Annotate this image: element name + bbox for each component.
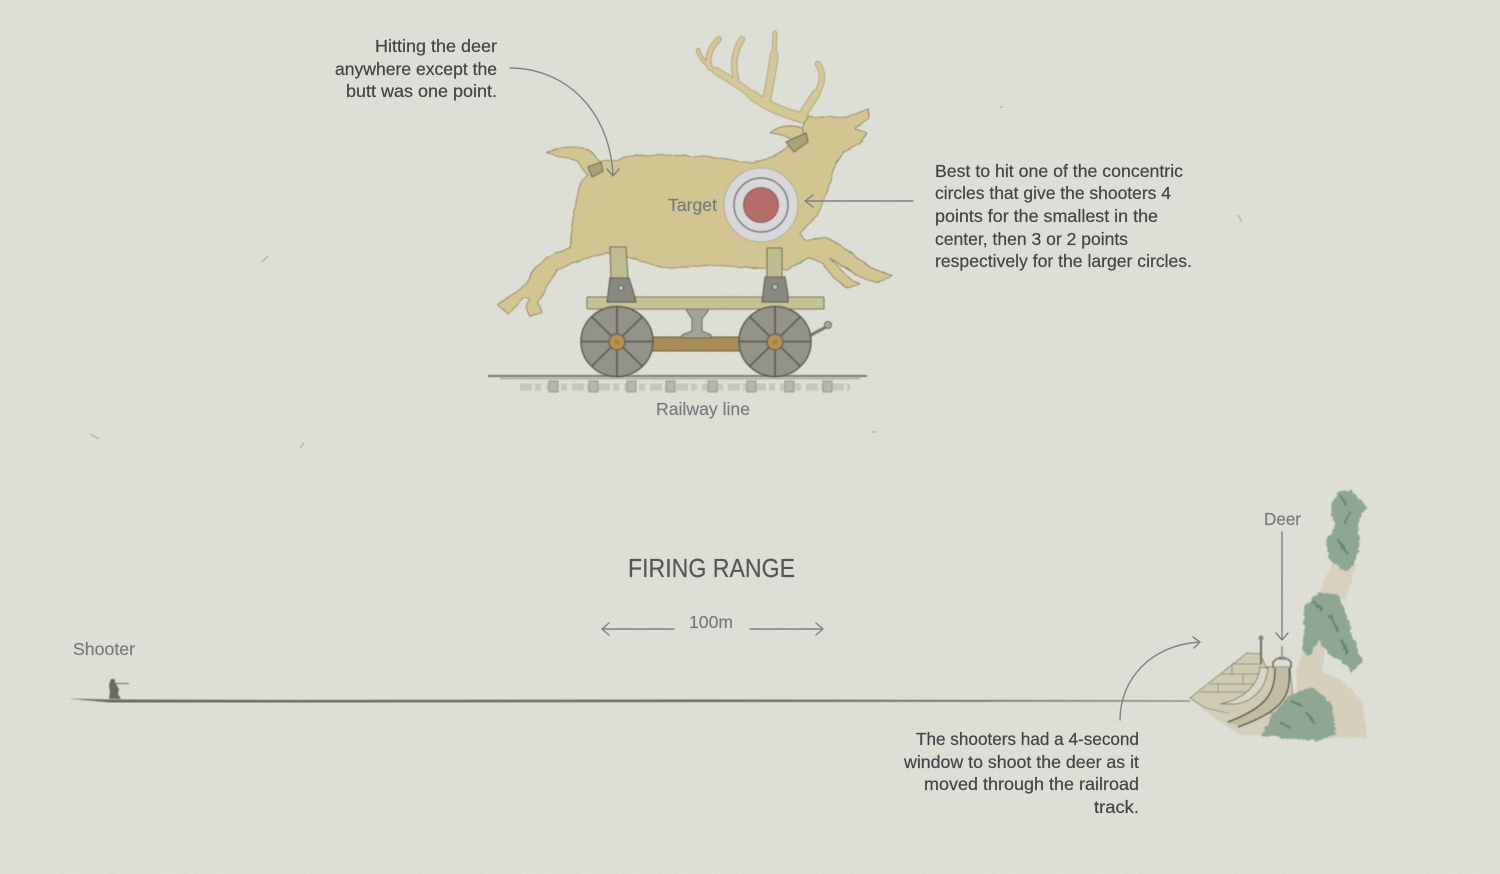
right wheel xyxy=(739,306,811,376)
arrow: to deer body xyxy=(510,68,619,176)
foliage xyxy=(1262,490,1367,741)
rock pillar xyxy=(1296,625,1367,738)
text: concentric circles: respectively for the larger circles. xyxy=(935,251,1192,271)
text: concentric circles xyxy=(935,161,1192,271)
embankment xyxy=(1190,636,1300,735)
label: 100m: 100m xyxy=(689,612,733,632)
railway track xyxy=(488,376,867,392)
deer antlers xyxy=(698,33,822,120)
text: concentric circles: circles that give the shooters 4 xyxy=(935,183,1171,203)
heading: firing range: FIRING RANGE xyxy=(628,553,795,583)
label: Shooter: Shooter xyxy=(73,639,135,659)
left wheel xyxy=(581,306,653,376)
text: hitting the deer: butt was one point. xyxy=(346,81,497,101)
text: concentric circles: center, then 3 or 2 points xyxy=(935,229,1128,249)
illustration: deer target on railcar xyxy=(488,33,892,392)
label: Railway line: Railway line xyxy=(656,399,750,419)
left post xyxy=(607,247,636,302)
illustration: hillside with trees xyxy=(1190,490,1367,741)
right post xyxy=(762,248,788,302)
text: 4-second window xyxy=(903,729,1139,817)
text: concentric circles: points for the smallest in the xyxy=(935,206,1158,226)
label: Target: Target xyxy=(668,195,717,215)
ground line xyxy=(68,698,1190,702)
arrow: window curve xyxy=(1120,637,1200,720)
deer body xyxy=(498,109,892,317)
text: concentric circles: Best to hit one of the concentric xyxy=(935,161,1183,181)
arrow: to target xyxy=(805,195,913,207)
tail joint xyxy=(588,162,603,177)
railcar xyxy=(581,297,832,376)
target rings xyxy=(724,168,798,242)
arrow: distance right xyxy=(750,623,823,635)
arrow: to deer xyxy=(1276,532,1288,640)
arrow: distance left xyxy=(602,623,674,635)
text: 4-second window: track. xyxy=(1094,797,1139,817)
neck joint xyxy=(786,133,808,152)
text: 4-second window: moved through the railroad xyxy=(924,774,1139,794)
label: Deer: Deer xyxy=(1264,509,1301,529)
tree trunk xyxy=(1320,558,1356,600)
text: hitting the deer: Hitting the deer xyxy=(375,36,497,56)
icon: shooter figure xyxy=(109,679,129,699)
text: hitting the deer: anywhere except the xyxy=(335,59,497,79)
deer ear xyxy=(770,126,806,143)
text: hitting the deer xyxy=(335,36,497,101)
text: 4-second window: window to shoot the deer as it xyxy=(903,752,1139,772)
text: 4-second window: The shooters had a 4-second xyxy=(916,729,1139,749)
